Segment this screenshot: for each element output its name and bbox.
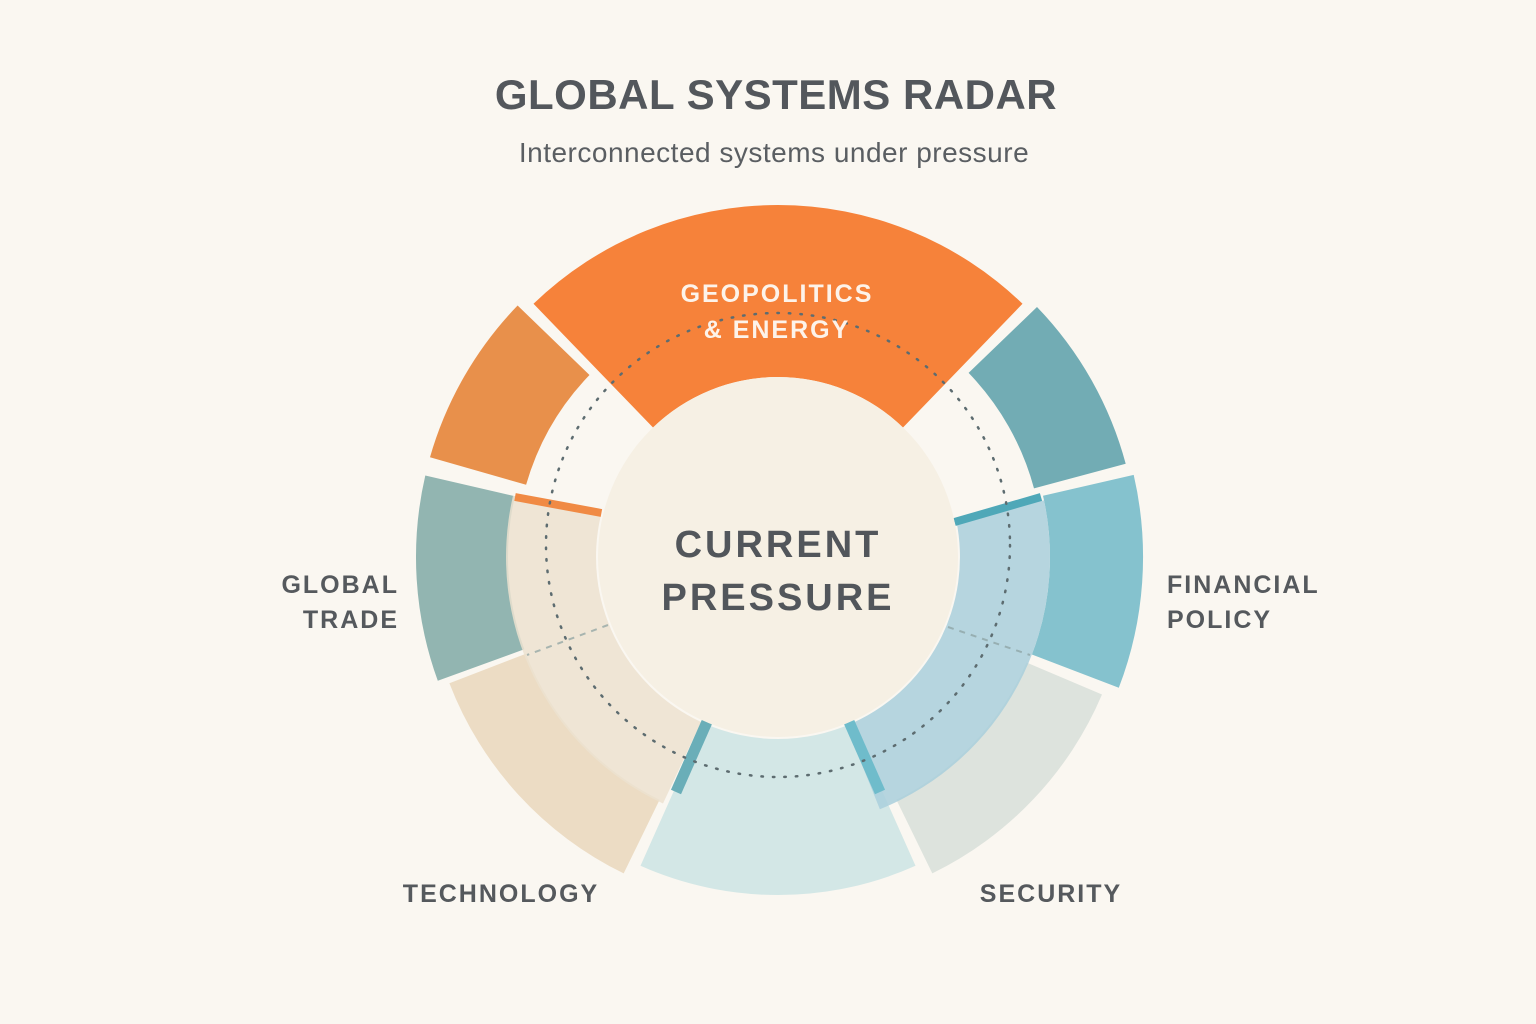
segment: geopolitics & energy xyxy=(534,205,1022,428)
segment: security outer xyxy=(896,662,1102,873)
label: global trade: GLOBAL xyxy=(281,571,399,599)
center circle xyxy=(598,377,958,737)
segment: bottom light teal xyxy=(640,723,916,895)
title: GLOBAL SYSTEMS RADAR xyxy=(495,71,1057,118)
dashed connectors xyxy=(527,625,1030,655)
center label: CURRENT xyxy=(675,524,881,566)
label: global trade: TRADE xyxy=(303,606,399,634)
segment: upper right teal xyxy=(969,307,1126,488)
label: geopolitics & energy: GEOPOLITICS xyxy=(681,280,873,308)
accent strips xyxy=(515,497,1041,792)
subtitle: Interconnected systems under pressure xyxy=(519,137,1029,168)
segment: upper left orange xyxy=(430,306,590,485)
label: geopolitics & energy: & ENERGY xyxy=(704,316,850,344)
label: geopolitics & energy xyxy=(681,280,873,344)
label: financial policy: POLICY xyxy=(1167,606,1272,634)
segment: technology outer xyxy=(449,654,660,873)
inner ring: beige xyxy=(506,496,701,804)
label: security: SECURITY xyxy=(980,880,1122,908)
dotted ring xyxy=(546,313,1010,777)
segment: global trade xyxy=(416,476,524,681)
center label: PRESSURE xyxy=(661,577,895,619)
inner ring: blue xyxy=(846,500,1050,809)
label: financial policy xyxy=(1167,571,1320,634)
segment: financial policy xyxy=(1032,475,1143,688)
center label xyxy=(661,524,895,619)
label: technology: TECHNOLOGY xyxy=(403,880,599,908)
label: financial policy: FINANCIAL xyxy=(1167,571,1320,599)
label: global trade xyxy=(281,571,399,634)
radar chart xyxy=(416,205,1143,895)
